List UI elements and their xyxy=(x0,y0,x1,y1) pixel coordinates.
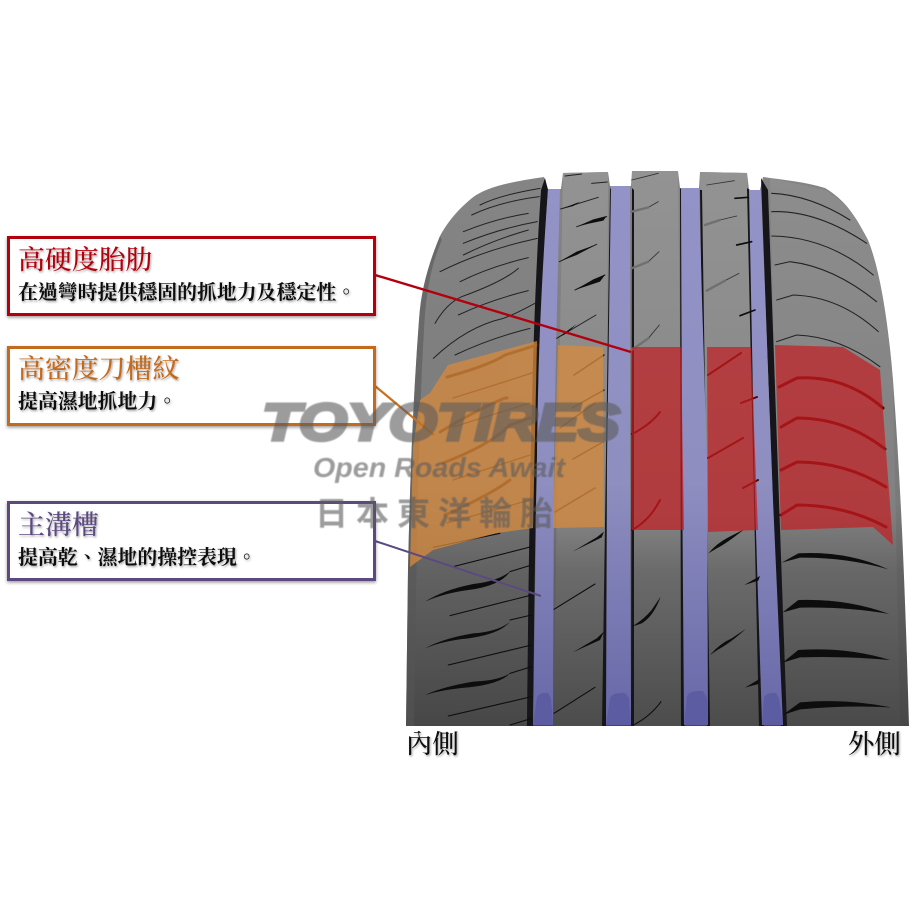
description: 提高濕地抓地力。 xyxy=(18,389,177,413)
heading: 主溝槽 xyxy=(18,510,99,540)
panel: main grooves xyxy=(8,502,374,580)
tread sipes beneath red area xyxy=(632,353,886,530)
purple leader line xyxy=(375,541,541,596)
description: 提高乾、濕地的操控表現。 xyxy=(18,545,257,569)
blue main grooves xyxy=(533,186,783,725)
tread sipes upper xyxy=(433,173,880,367)
tread sipes beneath orange area xyxy=(440,345,604,523)
red overlay: high rigidity ribs xyxy=(632,345,893,545)
heading: 高密度刀槽紋 xyxy=(18,354,179,384)
panel: high rigidity ribs xyxy=(8,238,374,314)
label: inner side: 內側 xyxy=(406,729,459,759)
red leader line xyxy=(375,275,631,352)
orange leader line xyxy=(375,386,434,435)
heading: 高硬度胎肋 xyxy=(18,245,152,275)
tire tread xyxy=(406,171,909,726)
description: 在過彎時提供穩固的抓地力及穩定性。 xyxy=(18,280,356,304)
center ribs xyxy=(553,171,763,726)
watermark slogan: Open Roads Await xyxy=(313,452,567,483)
red box xyxy=(8,238,374,314)
orange box xyxy=(8,348,374,424)
watermark company name: 日本東洋輪胎 xyxy=(315,495,561,532)
label: outer side: 外側 xyxy=(848,729,901,759)
thick blades upper xyxy=(557,202,607,338)
tire silhouette xyxy=(406,171,909,726)
tread sipes lower xyxy=(425,529,891,725)
watermark xyxy=(262,394,620,532)
orange overlay: high density sipes xyxy=(410,341,604,567)
watermark brand: TOYOTIRES xyxy=(262,394,620,452)
groove shadows xyxy=(527,178,787,726)
purple box xyxy=(8,502,374,580)
panel: high density sipes xyxy=(8,348,374,424)
right shoulder highlight xyxy=(770,178,900,726)
left sidewall band xyxy=(406,236,442,726)
